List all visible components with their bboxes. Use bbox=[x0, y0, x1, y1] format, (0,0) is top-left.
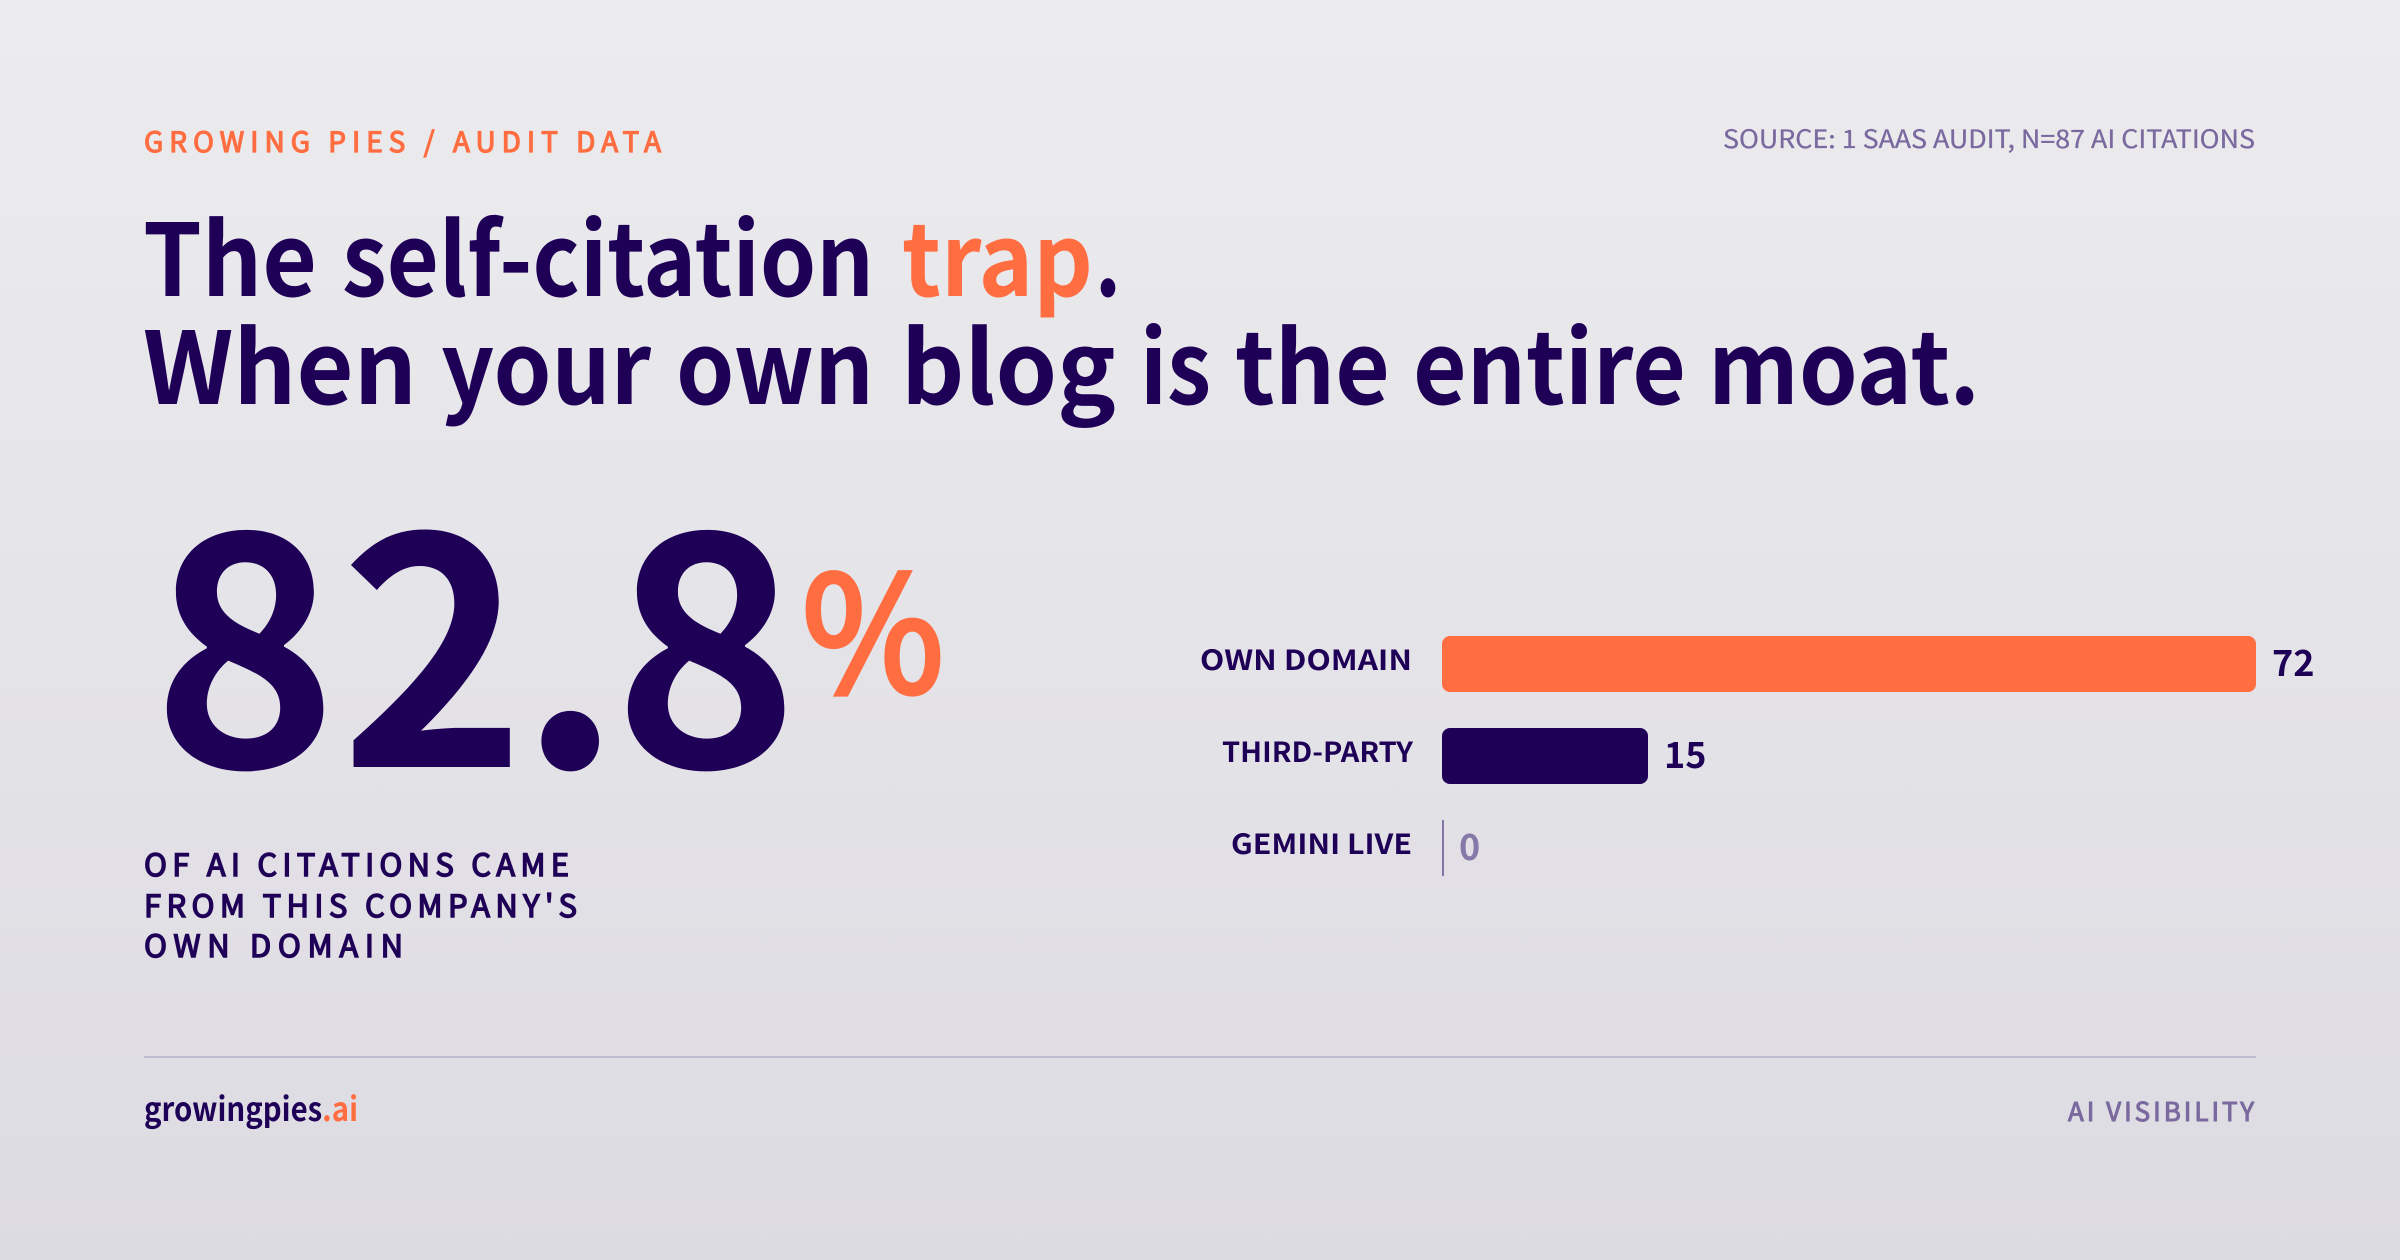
title: own bbox=[676, 288, 874, 433]
title: is bbox=[1140, 288, 1211, 433]
bar row: own domain: 72 bbox=[2272, 635, 2314, 687]
stat description: FROM THIS COMPANY'S bbox=[144, 881, 577, 926]
big stat 82.8%: 82.8 bbox=[152, 402, 799, 858]
percent sign: % bbox=[802, 507, 944, 739]
source note: SOURCE: 1 SAAS AUDIT, N=87 AI CITATIONS bbox=[1723, 120, 2255, 156]
bar row: third-party: THIRD-PARTY bbox=[1222, 731, 1414, 771]
footer tag: AI VISIBILITY bbox=[2068, 1092, 2254, 1129]
title: When bbox=[143, 288, 417, 433]
title: entire bbox=[1413, 288, 1686, 433]
title: . bbox=[1095, 180, 1121, 325]
title bbox=[143, 180, 1980, 433]
title: blog bbox=[901, 288, 1116, 433]
header kicker: GROWING PIES / AUDIT DATA bbox=[144, 121, 661, 161]
stat description bbox=[144, 840, 577, 966]
footer brand: growingpies.ai bbox=[144, 1083, 358, 1131]
bar chart bbox=[1200, 635, 2314, 876]
title: trap bbox=[902, 180, 1093, 325]
stat description: OF AI CITATIONS CAME bbox=[144, 840, 569, 885]
title: self-citation bbox=[342, 180, 874, 325]
bar row: third-party bbox=[1222, 727, 1706, 784]
bar row: third-party: 15 bbox=[1664, 727, 1706, 779]
bar row: gemini live: GEMINI LIVE bbox=[1231, 823, 1412, 863]
title: your bbox=[441, 288, 651, 433]
stat description: OWN DOMAIN bbox=[144, 921, 403, 966]
bar row: gemini live bbox=[1231, 819, 1480, 876]
title: moat. bbox=[1708, 288, 1980, 433]
bar row: gemini live: 0 bbox=[1459, 819, 1480, 871]
bar row: own domain bbox=[1200, 635, 2314, 692]
title: The bbox=[143, 180, 317, 325]
bar row: own domain: OWN DOMAIN bbox=[1200, 639, 1412, 679]
title: the bbox=[1235, 288, 1390, 433]
